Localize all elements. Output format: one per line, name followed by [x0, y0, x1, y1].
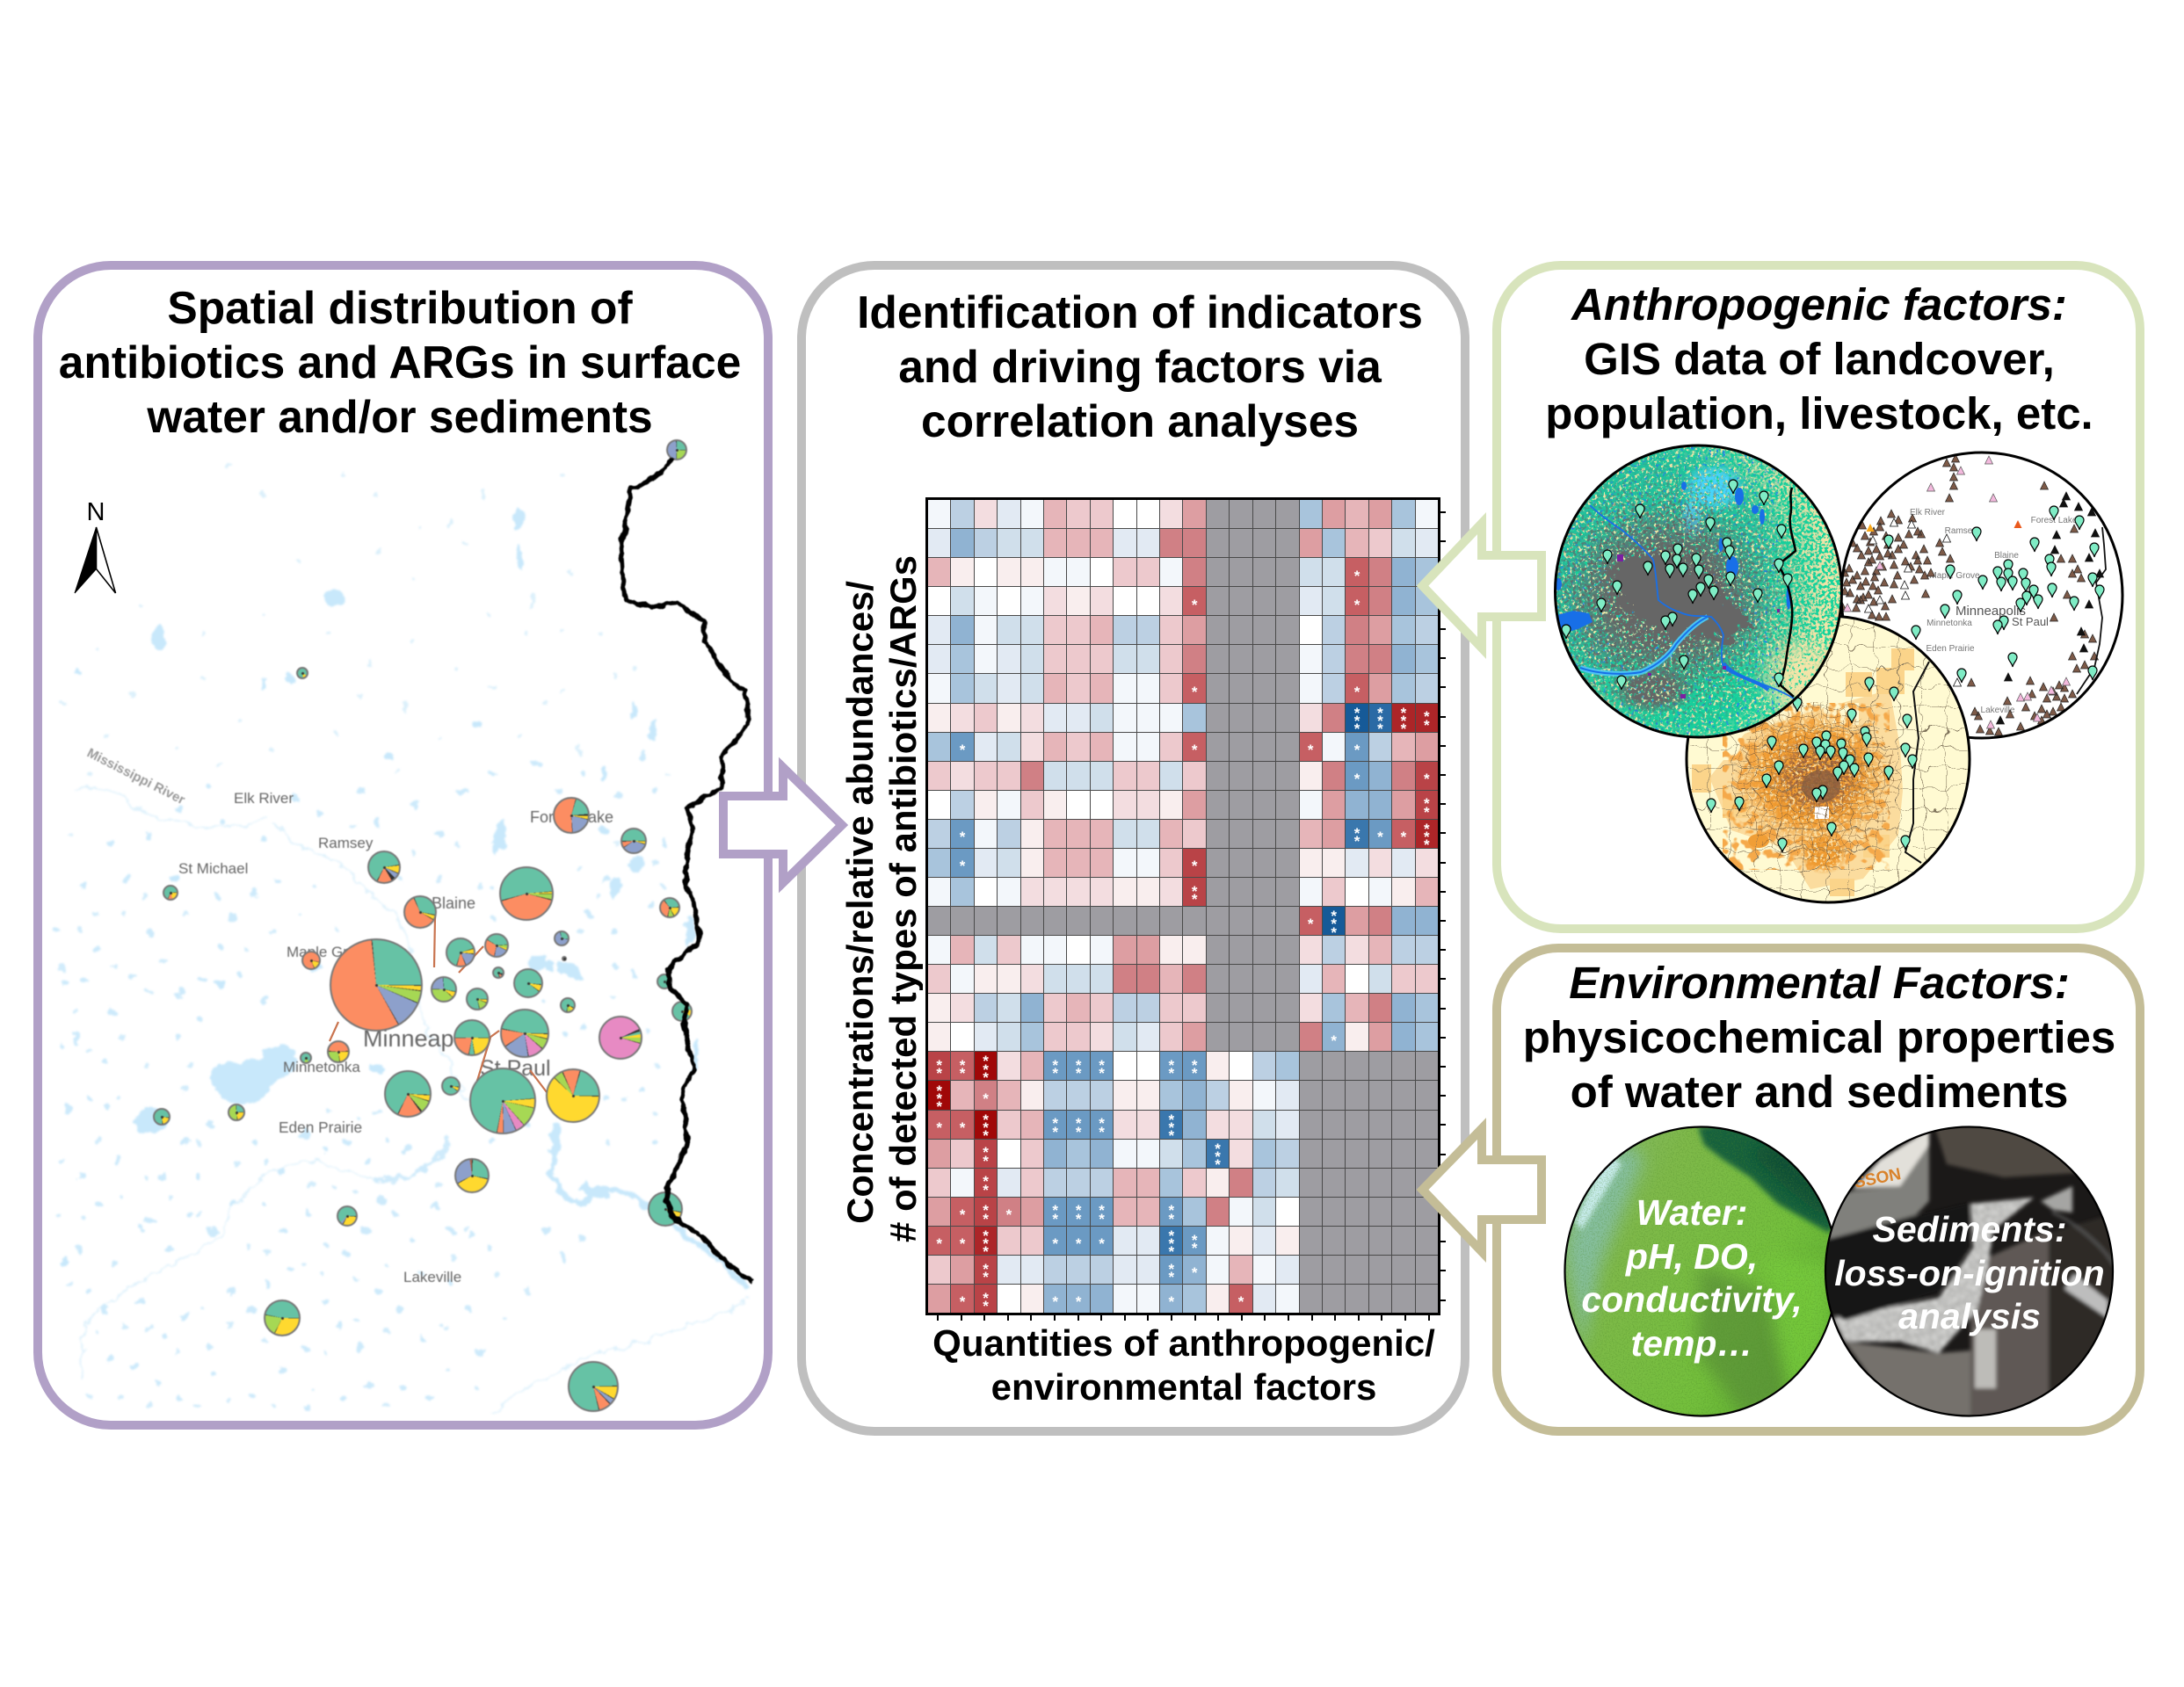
map: place name labels: Minnetonka [283, 1059, 360, 1075]
heatmap: correlation matrix: * [1377, 705, 1383, 721]
heatmap: correlation matrix: * [936, 1090, 942, 1107]
heatmap: correlation matrix: * [1168, 1227, 1174, 1244]
heatmap: correlation matrix: * [1308, 742, 1314, 758]
heatmap: correlation matrix: * [983, 1144, 989, 1161]
pie: site 16 [513, 968, 543, 998]
heatmap: correlation matrix: * [1052, 1293, 1058, 1310]
heatmap: correlation matrix: * [1168, 1202, 1174, 1219]
heatmap: correlation matrix [925, 497, 1440, 1315]
pie charts: sampling sites [152, 438, 693, 1413]
heatmap: correlation matrix: * [1354, 597, 1360, 613]
heatmap: correlation matrix: * [1354, 771, 1360, 787]
pie: site 14 [492, 967, 504, 979]
heatmap: correlation matrix: * [1168, 1235, 1174, 1252]
map circle: livestock facilities: Elk River [1910, 508, 1946, 518]
heatmap axis ticks [937, 511, 1446, 1321]
heatmap: correlation matrix: * [1076, 1124, 1081, 1140]
heatmap: correlation matrix: * [983, 1182, 989, 1198]
heatmap: correlation matrix: * [1354, 684, 1360, 700]
heatmap: correlation matrix: * [1076, 1211, 1081, 1227]
heatmap: correlation matrix: * [1424, 821, 1430, 837]
GIS map circles [1554, 445, 2123, 903]
pie: site 37 [296, 667, 308, 679]
heatmap: correlation matrix: * [1192, 742, 1197, 758]
pie: Forest Lake [553, 797, 590, 834]
heatmap: correlation matrix: * [1052, 1235, 1058, 1252]
caption: sediments analysis: analysis [1898, 1296, 2041, 1336]
heatmap: correlation matrix: * [983, 1243, 989, 1260]
heatmap: correlation matrix: * [936, 1098, 942, 1115]
pie: site 24 [327, 1040, 350, 1063]
map circle: livestock facilities: Ramsey [1945, 526, 1977, 536]
pie: site 31 [454, 1158, 490, 1193]
pie: site 28 yellow [546, 1068, 600, 1123]
heading: environmental factors [1523, 958, 2115, 1117]
heatmap: correlation matrix: * [1401, 713, 1406, 729]
heatmap: correlation matrix: * [1331, 924, 1337, 941]
heatmap: correlation matrix: * [1215, 1148, 1221, 1165]
pie: site 32 [337, 1206, 358, 1227]
heatmap: correlation matrix: * [960, 1235, 965, 1252]
heatmap: correlation matrix: * [1424, 795, 1430, 812]
heading: identification of indicators: and driving factors via [898, 341, 1382, 392]
pie: site 15 [466, 988, 489, 1010]
heatmap: correlation matrix: * [1354, 720, 1360, 737]
map circle: landcover [1554, 445, 1843, 738]
heatmap: correlation matrix: * [1168, 1261, 1174, 1278]
photo circle: water [1564, 1126, 1832, 1417]
heatmap: correlation matrix: * [1076, 1293, 1081, 1310]
caption: water parameters: pH, DO, [1626, 1235, 1758, 1276]
heatmap: correlation matrix: * [983, 1261, 989, 1278]
caption: water parameters: temp… [1631, 1323, 1752, 1364]
heatmap: correlation matrix: * [1354, 825, 1360, 842]
pie: site 18 [453, 1019, 490, 1056]
heatmap: correlation matrix: * [960, 1119, 965, 1136]
pie: site 26 [441, 1076, 461, 1096]
heatmap: correlation matrix: * [1354, 568, 1360, 584]
heatmap: correlation matrix: * [936, 1065, 942, 1082]
pie: site 25 [384, 1070, 432, 1118]
map circle: livestock facilities: Blaine [1994, 551, 2019, 561]
pie: St Michael [163, 885, 178, 901]
heatmap: correlation matrix: * [1377, 713, 1383, 729]
heatmap: correlation matrix: * [983, 1173, 989, 1190]
y axis label [839, 555, 923, 1242]
map: place name labels: Mississippi River [84, 745, 187, 807]
heatmap: correlation matrix: * [983, 1298, 989, 1314]
map: place name labels: Ramsey [318, 835, 374, 851]
heatmap: correlation matrix: * [1331, 916, 1337, 932]
panel: environmental factors [1492, 944, 2144, 1436]
heatmap: correlation matrix: * [1424, 708, 1430, 725]
map circle: livestock facilities: Forest Lake [2031, 516, 2078, 525]
map: lakes and rivers background [52, 462, 751, 1415]
pie: site 20 pink [599, 1016, 642, 1060]
y axis label: Concentrations/relative abundances/ [839, 581, 881, 1224]
photo circle: sediments [1825, 1126, 2115, 1417]
map: place name labels: Maple Grove [287, 944, 372, 960]
pie: site 3 [620, 828, 647, 854]
heatmap: correlation matrix: * [1192, 1232, 1197, 1249]
heatmap: correlation matrix: * [1215, 1140, 1221, 1157]
heatmap: correlation matrix: * [1192, 597, 1197, 613]
map circle: population density [1683, 613, 1973, 905]
heatmap: correlation matrix: * [1099, 1115, 1105, 1132]
heatmap: correlation matrix: * [1354, 742, 1360, 758]
heatmap: correlation matrix: * [1354, 833, 1360, 850]
heatmap: correlation matrix: * [1076, 1065, 1081, 1082]
map: place name labels: Lakeville [403, 1269, 461, 1285]
map: leader lines [329, 916, 547, 1093]
map: place name labels: Blaine [432, 894, 475, 912]
heading: anthropogenic factors: GIS data of landcover, [1584, 334, 2055, 384]
river: Wisconsin border line [617, 457, 754, 1285]
heading: spatial distribution [59, 282, 741, 442]
heatmap: correlation matrix: * [1331, 908, 1337, 924]
map: place name labels: Minneapolis [363, 1025, 490, 1052]
heading: spatial distribution: antibiotics and ARGs in surface [59, 337, 741, 387]
heading: anthropogenic factors [1545, 279, 2093, 438]
heatmap: correlation matrix: * [1401, 829, 1406, 845]
arrow: anthropogenic factors to correlation [1417, 512, 1546, 659]
pie: site 5 [499, 866, 554, 921]
x axis label: Quantities of anthropogenic/ [932, 1322, 1435, 1364]
heatmap: correlation matrix: * [983, 1290, 989, 1307]
heatmap: correlation matrix: * [1076, 1235, 1081, 1252]
heatmap: correlation matrix: * [1424, 836, 1430, 853]
map: place name labels: St Michael [178, 860, 248, 877]
heatmap: correlation matrix: * [1168, 1293, 1174, 1310]
x axis label: environmental factors [991, 1366, 1376, 1408]
heatmap: correlation matrix: * [983, 1111, 989, 1128]
heatmap: correlation matrix: * [1168, 1243, 1174, 1260]
heatmap: correlation matrix: * [1215, 1156, 1221, 1173]
panel: spatial distribution map [33, 261, 773, 1430]
heatmap: correlation matrix: * [983, 1202, 989, 1219]
heatmap: correlation matrix: * [960, 1065, 965, 1082]
heatmap: correlation matrix: * [960, 1206, 965, 1223]
heading: identification of indicators: correlation analyses [921, 395, 1359, 446]
heatmap: correlation matrix: * [1168, 1119, 1174, 1136]
map circle: livestock facilities: Maple Grove [1929, 571, 1980, 581]
heatmap: correlation matrix: * [1168, 1211, 1174, 1227]
map: place name labels: St Paul [480, 1056, 551, 1081]
map: place name labels [84, 745, 613, 1285]
pie: site 22 [671, 1001, 693, 1022]
map: place name labels: Elk River [234, 790, 294, 807]
pie: site 11 dot [562, 956, 567, 961]
map circle: livestock facilities [1837, 448, 2127, 742]
heading: spatial distribution: water and/or sediments [147, 391, 653, 442]
pie: site 30 [228, 1104, 245, 1121]
heatmap: correlation matrix: * [1238, 1293, 1244, 1310]
heatmap: correlation matrix: * [960, 829, 965, 845]
heatmap: correlation matrix: * [1168, 1127, 1174, 1144]
heatmap: correlation matrix: * [960, 742, 965, 758]
heatmap: correlation matrix: * [1401, 705, 1406, 721]
map: place name labels: Forest Lake [530, 808, 613, 826]
heatmap: correlation matrix: * [936, 1082, 942, 1099]
heatmap: correlation matrix: * [1424, 804, 1430, 821]
pie: site 23 [300, 1052, 312, 1064]
heatmap: correlation matrix: * [1377, 720, 1383, 737]
heatmap: correlation matrix: * [1192, 1264, 1197, 1281]
heatmap: correlation matrix: * [1331, 1032, 1337, 1049]
heading: anthropogenic factors: population, livestock, etc. [1545, 388, 2093, 438]
heatmap: correlation matrix: * [960, 1293, 965, 1310]
heading: environmental factors: physicochemical properties [1523, 1012, 2115, 1062]
heatmap: correlation matrix: * [983, 1153, 989, 1169]
heatmap: correlation matrix: * [983, 1235, 989, 1252]
heatmap: correlation matrix: * [1052, 1202, 1058, 1219]
heatmap: correlation matrix: * [1192, 1065, 1197, 1082]
heatmap: correlation matrix: * [1076, 1115, 1081, 1132]
heatmap: correlation matrix: * [1076, 1202, 1081, 1219]
heatmap: correlation matrix: * [1099, 1057, 1105, 1074]
heatmap: correlation matrix: * [1401, 720, 1406, 737]
heading: spatial distribution: Spatial distribution of [167, 282, 633, 333]
heading: anthropogenic factors: Anthropogenic factors: [1571, 279, 2067, 329]
heatmap: correlation matrix: * [1099, 1202, 1105, 1219]
pie: site 29 [153, 1108, 171, 1126]
pie: site 21 [657, 974, 672, 989]
caption: sediments analysis [1834, 1209, 2105, 1336]
heatmap: correlation matrix: * [1052, 1124, 1058, 1140]
heatmap: correlation matrix: * [1168, 1111, 1174, 1128]
panel: anthropogenic factors [1492, 261, 2144, 933]
heatmap: correlation matrix: * [983, 1127, 989, 1144]
heatmap: correlation matrix: * [1192, 891, 1197, 908]
heatmap: correlation matrix: * [1424, 829, 1430, 845]
heading: identification of indicators [857, 286, 1423, 446]
pie: site 1 largest [330, 938, 423, 1032]
heatmap: correlation matrix: * [1424, 717, 1430, 734]
heatmap: correlation matrix: * [1052, 1211, 1058, 1227]
icon: north arrow [74, 498, 116, 594]
heatmap: correlation matrix: * [983, 1119, 989, 1136]
pie: Ramsey [367, 851, 401, 884]
map circle: livestock facilities: Eden Prairie [1926, 644, 1975, 654]
pie: site 8 [446, 938, 475, 967]
heatmap: correlation matrix: * [983, 1211, 989, 1227]
pie: site 35 [568, 1361, 619, 1412]
heatmap: correlation matrix: * [960, 858, 965, 874]
heatmap: correlation matrix: * [1099, 1124, 1105, 1140]
pie: site 10 [554, 930, 570, 946]
caption: water parameters: conductivity, [1581, 1279, 1803, 1320]
caption: sediments analysis: Sediments: [1872, 1209, 2067, 1249]
pie: site 12 [659, 897, 680, 918]
heatmap: correlation matrix: * [983, 1053, 989, 1069]
photo circle: sediments: SSON [1853, 1165, 1903, 1192]
heatmap: correlation matrix: * [983, 1069, 989, 1086]
y axis label: # of detected types of antibiotics/ARGs [882, 555, 923, 1242]
pie: site 36 north [666, 439, 687, 460]
heatmap: correlation matrix: * [1099, 1065, 1105, 1082]
heading: identification of indicators: Identification of indicators [857, 286, 1423, 337]
pie: site 33 [648, 1191, 683, 1227]
map circle: livestock facilities: Minnetonka [1926, 619, 1972, 628]
heatmap: correlation matrix: * [1192, 1240, 1197, 1256]
heatmap: correlation matrix: * [1168, 1269, 1174, 1285]
heading: environmental factors: of water and sediments [1571, 1067, 2068, 1117]
heatmap: correlation matrix: * [1006, 1206, 1012, 1223]
heatmap: correlation matrix: * [1052, 1065, 1058, 1082]
caption: water parameters [1581, 1192, 1803, 1364]
heatmap: correlation matrix: * [1354, 713, 1360, 729]
heatmap: correlation matrix: * [983, 1061, 989, 1078]
heatmap: correlation matrix: * [1052, 1115, 1058, 1132]
heatmap: correlation matrix: * [1192, 684, 1197, 700]
pie: site 27 [469, 1068, 536, 1134]
heatmap: correlation matrix: * [1099, 1235, 1105, 1252]
heatmap: correlation matrix: * [1099, 1211, 1105, 1227]
heatmap: correlation matrix: * [1308, 916, 1314, 932]
heatmap: correlation matrix: * [1192, 858, 1197, 874]
heatmap: correlation matrix: * [1192, 883, 1197, 900]
heatmap: correlation matrix: * [1052, 1057, 1058, 1074]
heatmap: correlation matrix: * [1192, 1057, 1197, 1074]
map: place name labels: Eden Prairie [279, 1119, 362, 1136]
caption: sediments analysis: loss-on-ignition [1834, 1253, 2105, 1293]
heatmap: correlation matrix: * [936, 1235, 942, 1252]
pie: Maple Grove [301, 951, 321, 970]
heatmap: correlation matrix: * [1424, 771, 1430, 787]
heatmap: correlation matrix: * [983, 1227, 989, 1244]
heatmap: correlation matrix: * [1377, 829, 1383, 845]
heatmap: correlation matrix: * [936, 1057, 942, 1074]
map circle: livestock facilities: St Paul [2012, 615, 2049, 628]
heatmap: correlation matrix: * [960, 1057, 965, 1074]
panel: correlation analyses [797, 261, 1469, 1436]
heatmap: correlation matrix: * [983, 1269, 989, 1285]
icon: north arrow: N [87, 498, 105, 526]
pie: site 9 [484, 933, 509, 958]
heatmap: correlation matrix: * [1354, 705, 1360, 721]
arrow: map to correlation [719, 757, 848, 893]
pie: site 34 [264, 1300, 301, 1336]
heatmap: correlation matrix: * [1168, 1057, 1174, 1074]
heatmap: correlation matrix: * [1168, 1065, 1174, 1082]
map circle: livestock facilities: Lakeville [1981, 706, 2015, 715]
pie: site 17 [560, 997, 576, 1013]
heatmap: correlation matrix: * [983, 1090, 989, 1107]
x axis label [932, 1322, 1435, 1408]
map circle: livestock facilities: Minneapolis [1955, 604, 2026, 619]
heatmap: correlation matrix: * [1076, 1057, 1081, 1074]
heatmap: correlation matrix: * [936, 1119, 942, 1136]
pie: Blaine [403, 895, 437, 929]
pie: site 19 [500, 1009, 549, 1058]
heading: environmental factors: Environmental Factors: [1569, 958, 2070, 1008]
pie: site 13 [431, 976, 457, 1003]
caption: water parameters: Water: [1636, 1192, 1747, 1233]
arrow: environmental factors to correlation [1417, 1118, 1546, 1263]
